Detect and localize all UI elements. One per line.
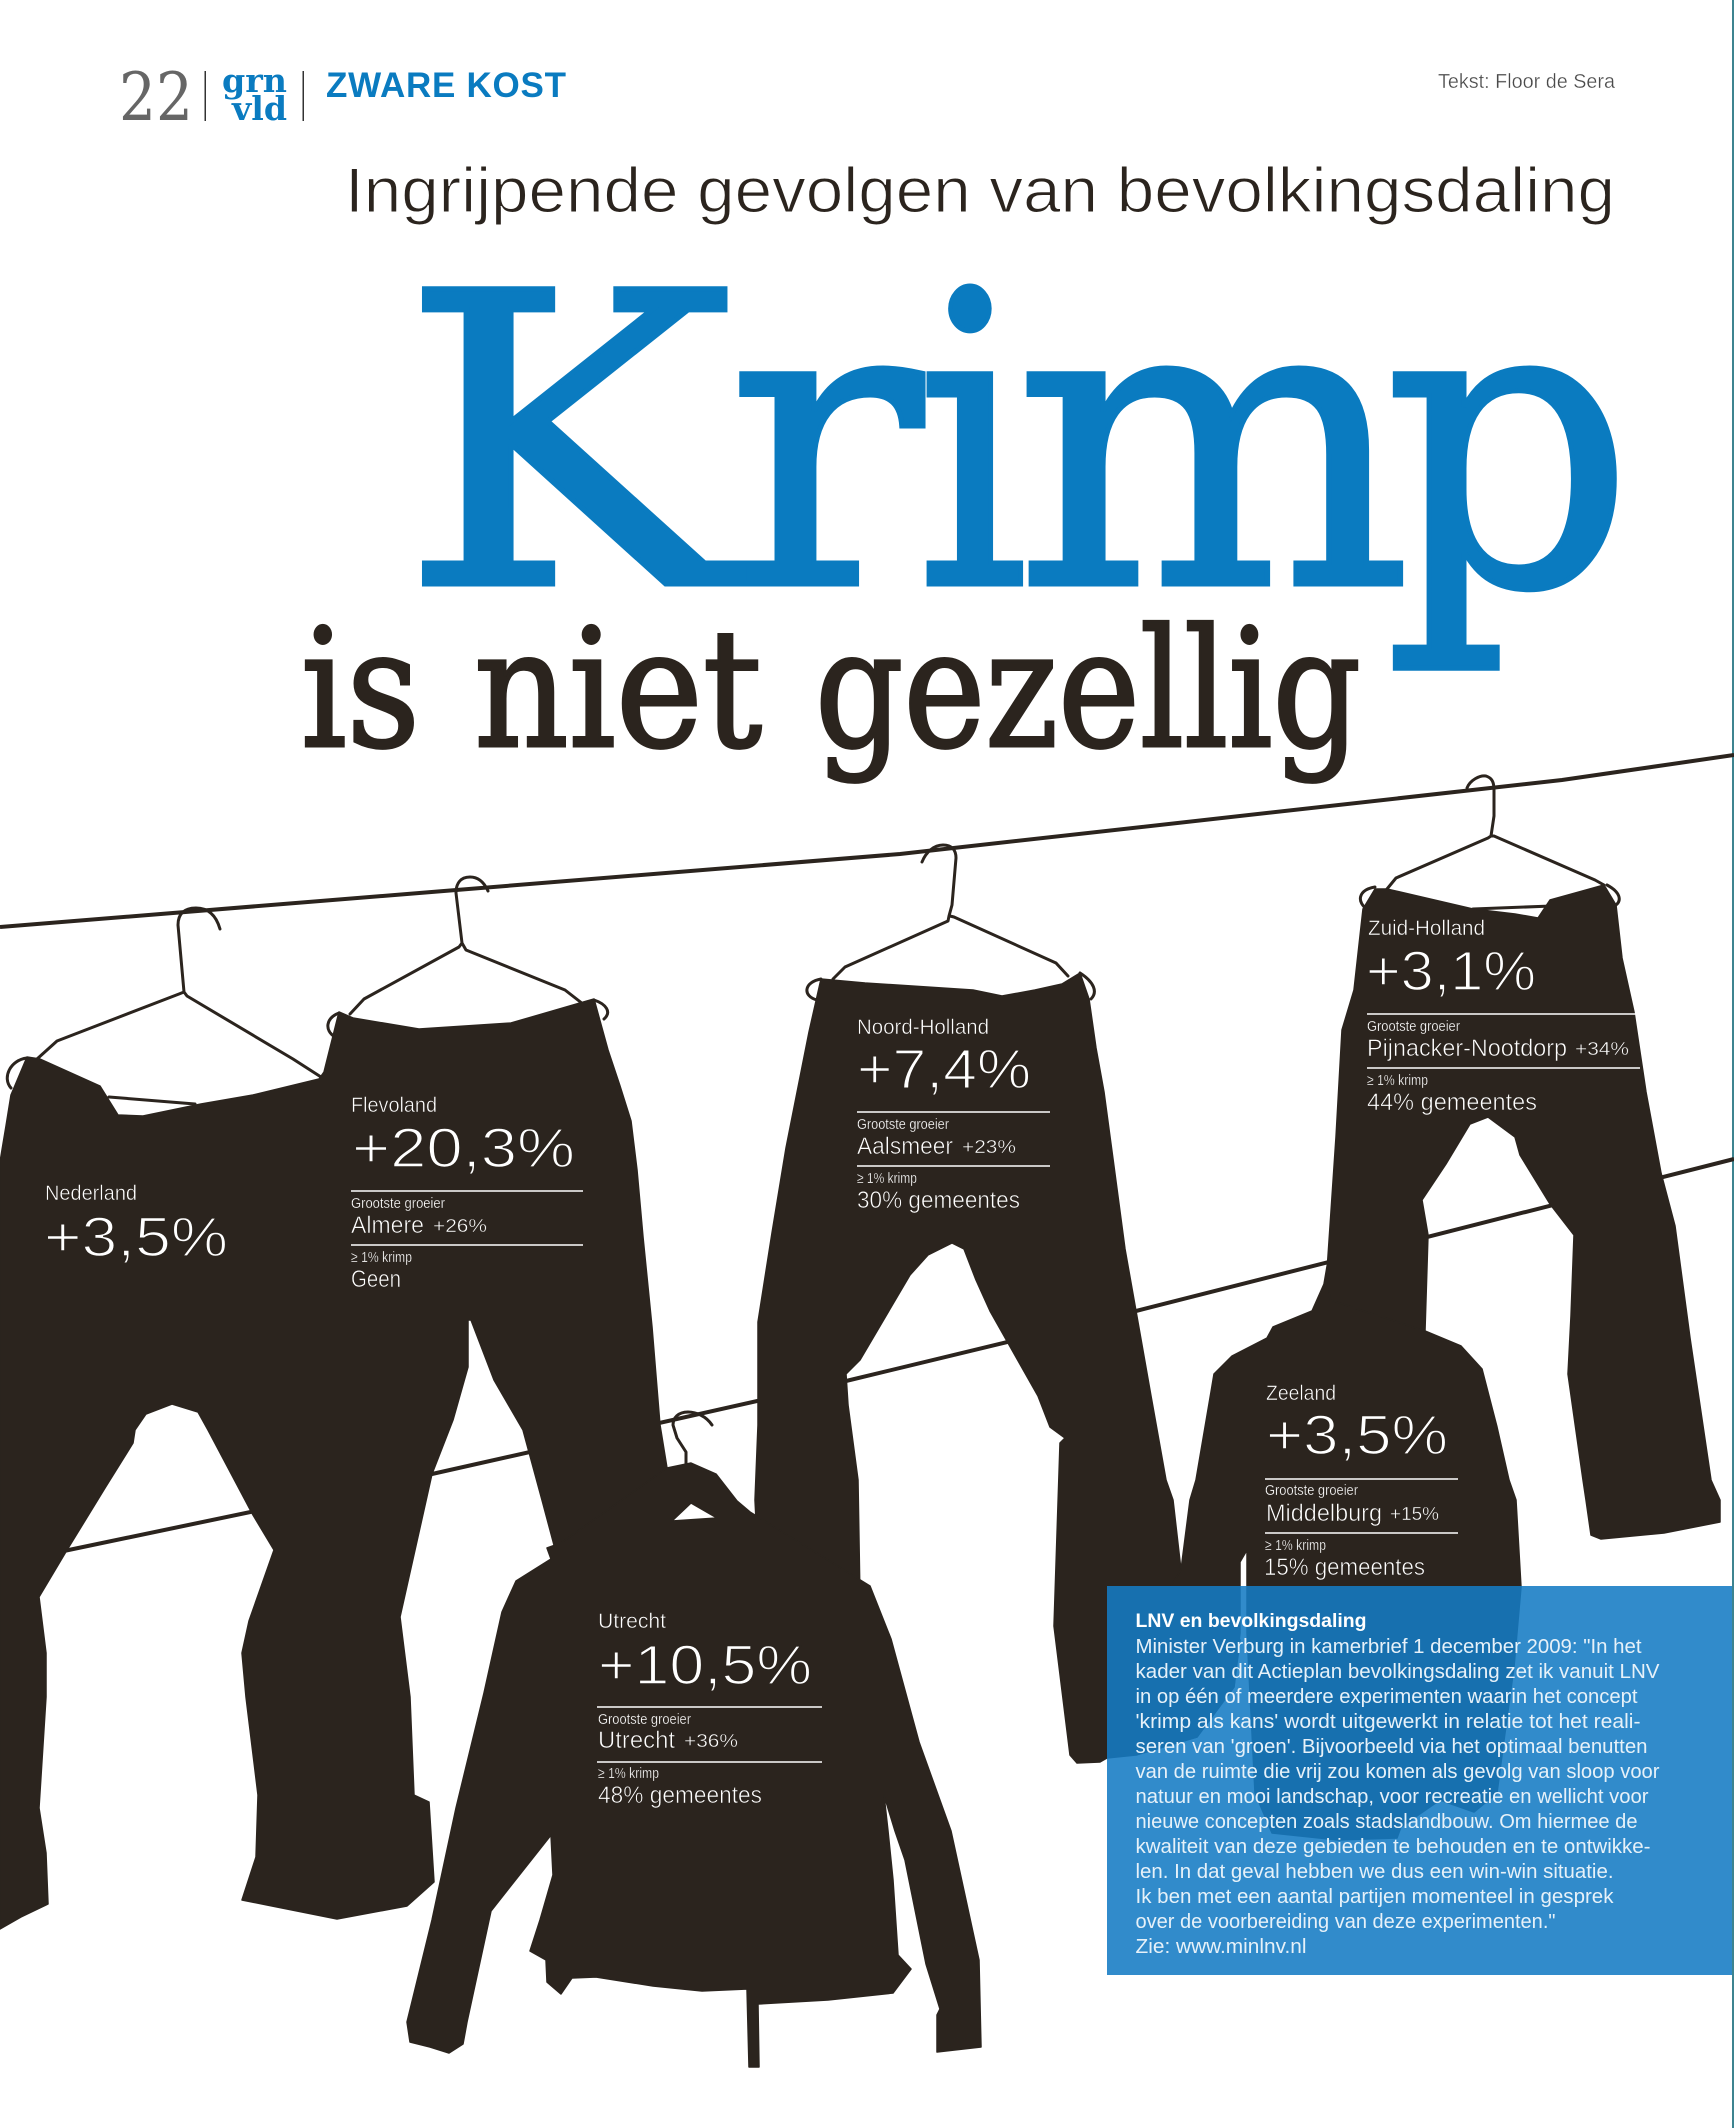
section label: ZWARE KOST xyxy=(326,66,566,105)
stats: Flevoland: +26% xyxy=(433,1216,487,1236)
stats: Noord-Holland xyxy=(857,1016,1050,1214)
main title: Krimp: p xyxy=(1384,208,1634,680)
panel body text: kader van dit Actieplan bevolkingsdaling zet ik vanuit LNV xyxy=(1136,1661,1660,1683)
region name: Nederland xyxy=(45,1182,137,1205)
stats: Flevoland: Geen xyxy=(351,1266,401,1293)
hanger: Flevoland xyxy=(328,877,608,1037)
region name: Zuid-Holland xyxy=(1368,917,1485,940)
stats: Zeeland: 15% gemeentes xyxy=(1264,1554,1425,1581)
region name: Flevoland xyxy=(351,1094,437,1117)
stats: Utrecht: Utrecht xyxy=(598,1727,675,1754)
panel heading: LNV en bevolkingsdaling xyxy=(1136,1611,1366,1632)
growth figure: +3,5% xyxy=(1266,1403,1448,1466)
silhouette: Utrecht jacket xyxy=(407,1463,981,2067)
region name: Utrecht xyxy=(598,1610,666,1633)
panel body text: nieuwe concepten zoals stadslandbouw. Om hiermee de xyxy=(1136,1811,1638,1833)
hanger: Noord-Holland xyxy=(807,845,1094,1000)
hanger: Utrecht xyxy=(673,1412,712,1465)
silhouette: Noord-Holland trousers xyxy=(755,973,1240,1763)
stats: Utrecht: 48% gemeentes xyxy=(598,1782,762,1809)
stats: Utrecht: +36% xyxy=(684,1731,738,1751)
silhouette: Zeeland jacket xyxy=(1130,1249,1521,1840)
panel body text: Minister Verburg in kamerbrief 1 december 2009: "In het xyxy=(1136,1636,1642,1658)
main title: Krimp: m xyxy=(1014,208,1412,680)
stats: Zuid-Holland: +34% xyxy=(1575,1039,1629,1059)
stats: Zeeland: Middelburg xyxy=(1266,1500,1382,1527)
stats: Utrecht xyxy=(597,1610,822,1809)
stats: Noord-Holland: 30% gemeentes xyxy=(857,1187,1020,1214)
main title: Krimp: i xyxy=(916,208,1029,680)
silhouette: Nederland and Flevoland trousers xyxy=(0,999,667,1929)
panel: LNV en bevolkingsdaling xyxy=(1107,1586,1732,1975)
panel body text: 'krimp als kans' wordt uitgewerkt in relatie tot het reali- xyxy=(1136,1711,1640,1733)
page number: 22 xyxy=(119,59,193,136)
stats: Noord-Holland: Aalsmeer xyxy=(857,1133,953,1160)
clothesline top xyxy=(0,755,1734,927)
panel body text: Ik ben met een aantal partijen momenteel in gesprek xyxy=(1136,1886,1615,1908)
biggest grower: Grootste groeier xyxy=(1367,1018,1460,1035)
shrink share: ≥ 1% krimp xyxy=(1367,1072,1428,1089)
hanger: Zuid-Holland xyxy=(1360,776,1619,910)
growth figure: +7,4% xyxy=(857,1037,1031,1100)
shrink share: ≥ 1% krimp xyxy=(598,1765,659,1782)
biggest grower: Grootste groeier xyxy=(351,1195,445,1212)
logo: grn vld xyxy=(222,61,287,128)
growth figure: +20,3% xyxy=(352,1116,575,1179)
panel body text: van de ruimte die vrij zou komen als gevolg van sloop voor xyxy=(1136,1761,1660,1783)
stats: Flevoland: Almere xyxy=(351,1212,424,1239)
panel body text: over de voorbereiding van deze experimenten." xyxy=(1136,1911,1556,1933)
biggest grower: Grootste groeier xyxy=(857,1116,949,1133)
main title: Krimp: r xyxy=(727,208,926,680)
hanger: Nederland xyxy=(7,908,321,1104)
panel body text: natuur en mooi landschap, voor recreatie en wellicht voor xyxy=(1136,1786,1649,1808)
growth figure: +3,1% xyxy=(1366,939,1536,1002)
panel body text: Zie: www.minlnv.nl xyxy=(1136,1936,1306,1958)
silhouette: Zuid-Holland trousers xyxy=(1327,885,1720,1539)
stats: Zuid-Holland: 44% gemeentes xyxy=(1367,1089,1537,1116)
logo: grn vld: grn xyxy=(222,61,287,100)
panel body text: len. In dat geval hebben we dus een win-win situatie. xyxy=(1136,1861,1614,1883)
main title: Krimp: K xyxy=(400,208,743,680)
stats: Zeeland xyxy=(1264,1382,1458,1581)
stats: Zuid-Holland xyxy=(1366,917,1640,1116)
title line: is niet gezellig: niet xyxy=(474,594,762,785)
panel body text: in op één of meerdere experimenten waarin het concept xyxy=(1136,1686,1638,1708)
stats: Zeeland: +15% xyxy=(1390,1504,1439,1524)
region name: Noord-Holland xyxy=(857,1016,989,1039)
growth figure: +10,5% xyxy=(598,1633,812,1696)
page header xyxy=(119,59,566,136)
stats: Zuid-Holland: Pijnacker-Nootdorp xyxy=(1367,1035,1567,1062)
logo: grn vld: vld xyxy=(231,89,287,128)
shrink share: ≥ 1% krimp xyxy=(1265,1537,1326,1554)
panel body text xyxy=(1136,1636,1660,1958)
shrink share: ≥ 1% krimp xyxy=(351,1249,412,1266)
stats: Flevoland xyxy=(351,1094,583,1293)
clothesline bottom xyxy=(40,1159,1734,1556)
subtitle: Ingrijpende gevolgen van bevolkingsdaling xyxy=(345,156,1615,226)
shrink share: ≥ 1% krimp xyxy=(857,1170,917,1187)
title line: is niet gezellig: is xyxy=(301,594,420,785)
panel body text: seren van 'groen'. Bijvoorbeeld via het optimaal benutten xyxy=(1136,1736,1648,1758)
region name: Zeeland xyxy=(1266,1382,1336,1405)
author credit: Tekst: Floor de Sera xyxy=(1438,71,1616,93)
biggest grower: Grootste groeier xyxy=(1265,1482,1358,1499)
panel body text: kwaliteit van deze gebieden te behouden en te ontwikke- xyxy=(1136,1836,1650,1858)
panel background xyxy=(1107,1586,1732,1975)
stats: Noord-Holland: +23% xyxy=(962,1137,1016,1157)
biggest grower: Grootste groeier xyxy=(598,1711,691,1728)
title line: is niet gezellig: gezellig xyxy=(815,594,1361,785)
stats: Nederland xyxy=(44,1182,228,1268)
growth figure: +3,5% xyxy=(44,1205,228,1268)
